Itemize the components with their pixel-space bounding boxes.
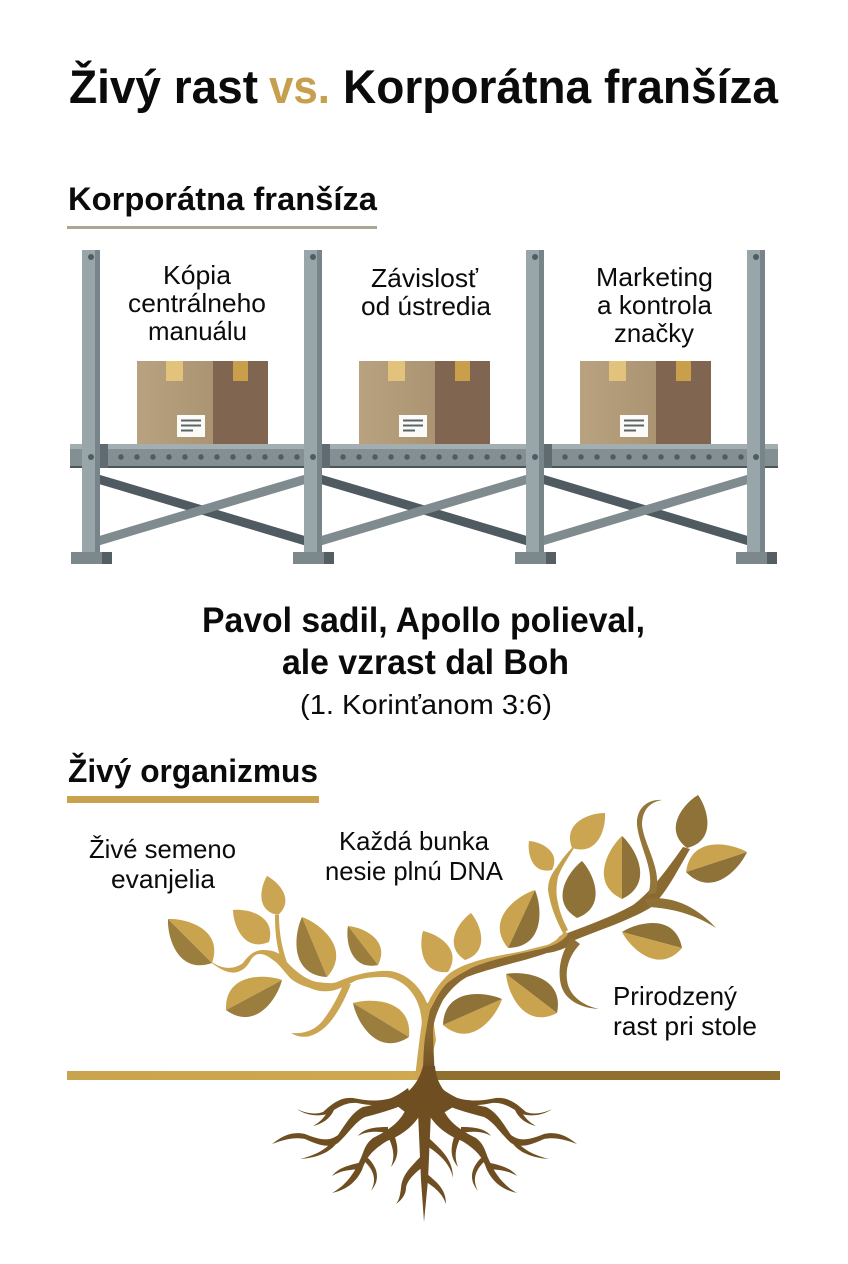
label: Kópia centrálneho manuálu: Kópia: [163, 260, 232, 290]
title: Korporátna franšíza: [343, 60, 779, 113]
label: Marketing a kontrola značky: a kontrola: [597, 290, 713, 320]
label: Závislosť od ústredia: od ústredia: [361, 291, 492, 321]
right leaves: [436, 792, 753, 1042]
label: Kópia centrálneho manuálu: [128, 260, 266, 346]
box 3: [580, 361, 711, 444]
panel: franchise rack: [70, 250, 778, 564]
label: Marketing a kontrola značky: [596, 262, 713, 348]
label: Prirodzený rast pri stole: rast pri stole: [613, 1011, 757, 1041]
title: Živý rast: [69, 60, 258, 113]
label: Každá bunka nesie plnú DNA: [325, 826, 504, 886]
left root group: [272, 1088, 420, 1193]
heading: Korporátna franšíza: Korporátna franšíza: [68, 181, 377, 217]
label: Každá bunka nesie plnú DNA: Každá bunka: [339, 826, 490, 856]
label: Každá bunka nesie plnú DNA: nesie plnú DNA: [325, 856, 504, 886]
label: Živé semeno evanjelia: evanjelia: [111, 864, 216, 894]
box 2: [359, 361, 490, 444]
title: [69, 60, 779, 113]
rack beam: [70, 444, 778, 468]
ground line: [67, 1071, 780, 1080]
scripture quote: (1. Korinťanom 3:6): [300, 689, 552, 720]
label: Živé semeno evanjelia: [89, 834, 236, 894]
label: Prirodzený rast pri stole: Prirodzený: [613, 981, 737, 1011]
box 1: [137, 361, 268, 444]
left leaves: [155, 873, 460, 1053]
label: Prirodzený rast pri stole: [613, 981, 757, 1041]
title: vs.: [269, 60, 330, 113]
label: Živé semeno evanjelia: Živé semeno: [89, 834, 236, 864]
label: Závislosť od ústredia: [361, 263, 492, 321]
cross braces: [98, 479, 749, 541]
label: Marketing a kontrola značky: Marketing: [596, 262, 713, 292]
roots: [272, 1066, 577, 1222]
label: Kópia centrálneho manuálu: manuálu: [148, 316, 247, 346]
right root group: [429, 1088, 577, 1193]
scripture quote: ale vzrast dal Boh: [282, 643, 569, 682]
label: Marketing a kontrola značky: značky: [614, 318, 694, 348]
label: Závislosť od ústredia: Závislosť: [371, 263, 478, 293]
label: Kópia centrálneho manuálu: centrálneho: [128, 288, 266, 318]
tree: [155, 792, 753, 1222]
scripture quote: [202, 601, 645, 720]
rack posts: [71, 250, 777, 564]
heading: Živý organizmus: Živý organizmus: [68, 753, 318, 789]
trunk and right branches: [415, 800, 716, 1080]
left branches: [212, 915, 427, 1037]
scripture quote: Pavol sadil, Apollo polieval,: [202, 601, 645, 640]
